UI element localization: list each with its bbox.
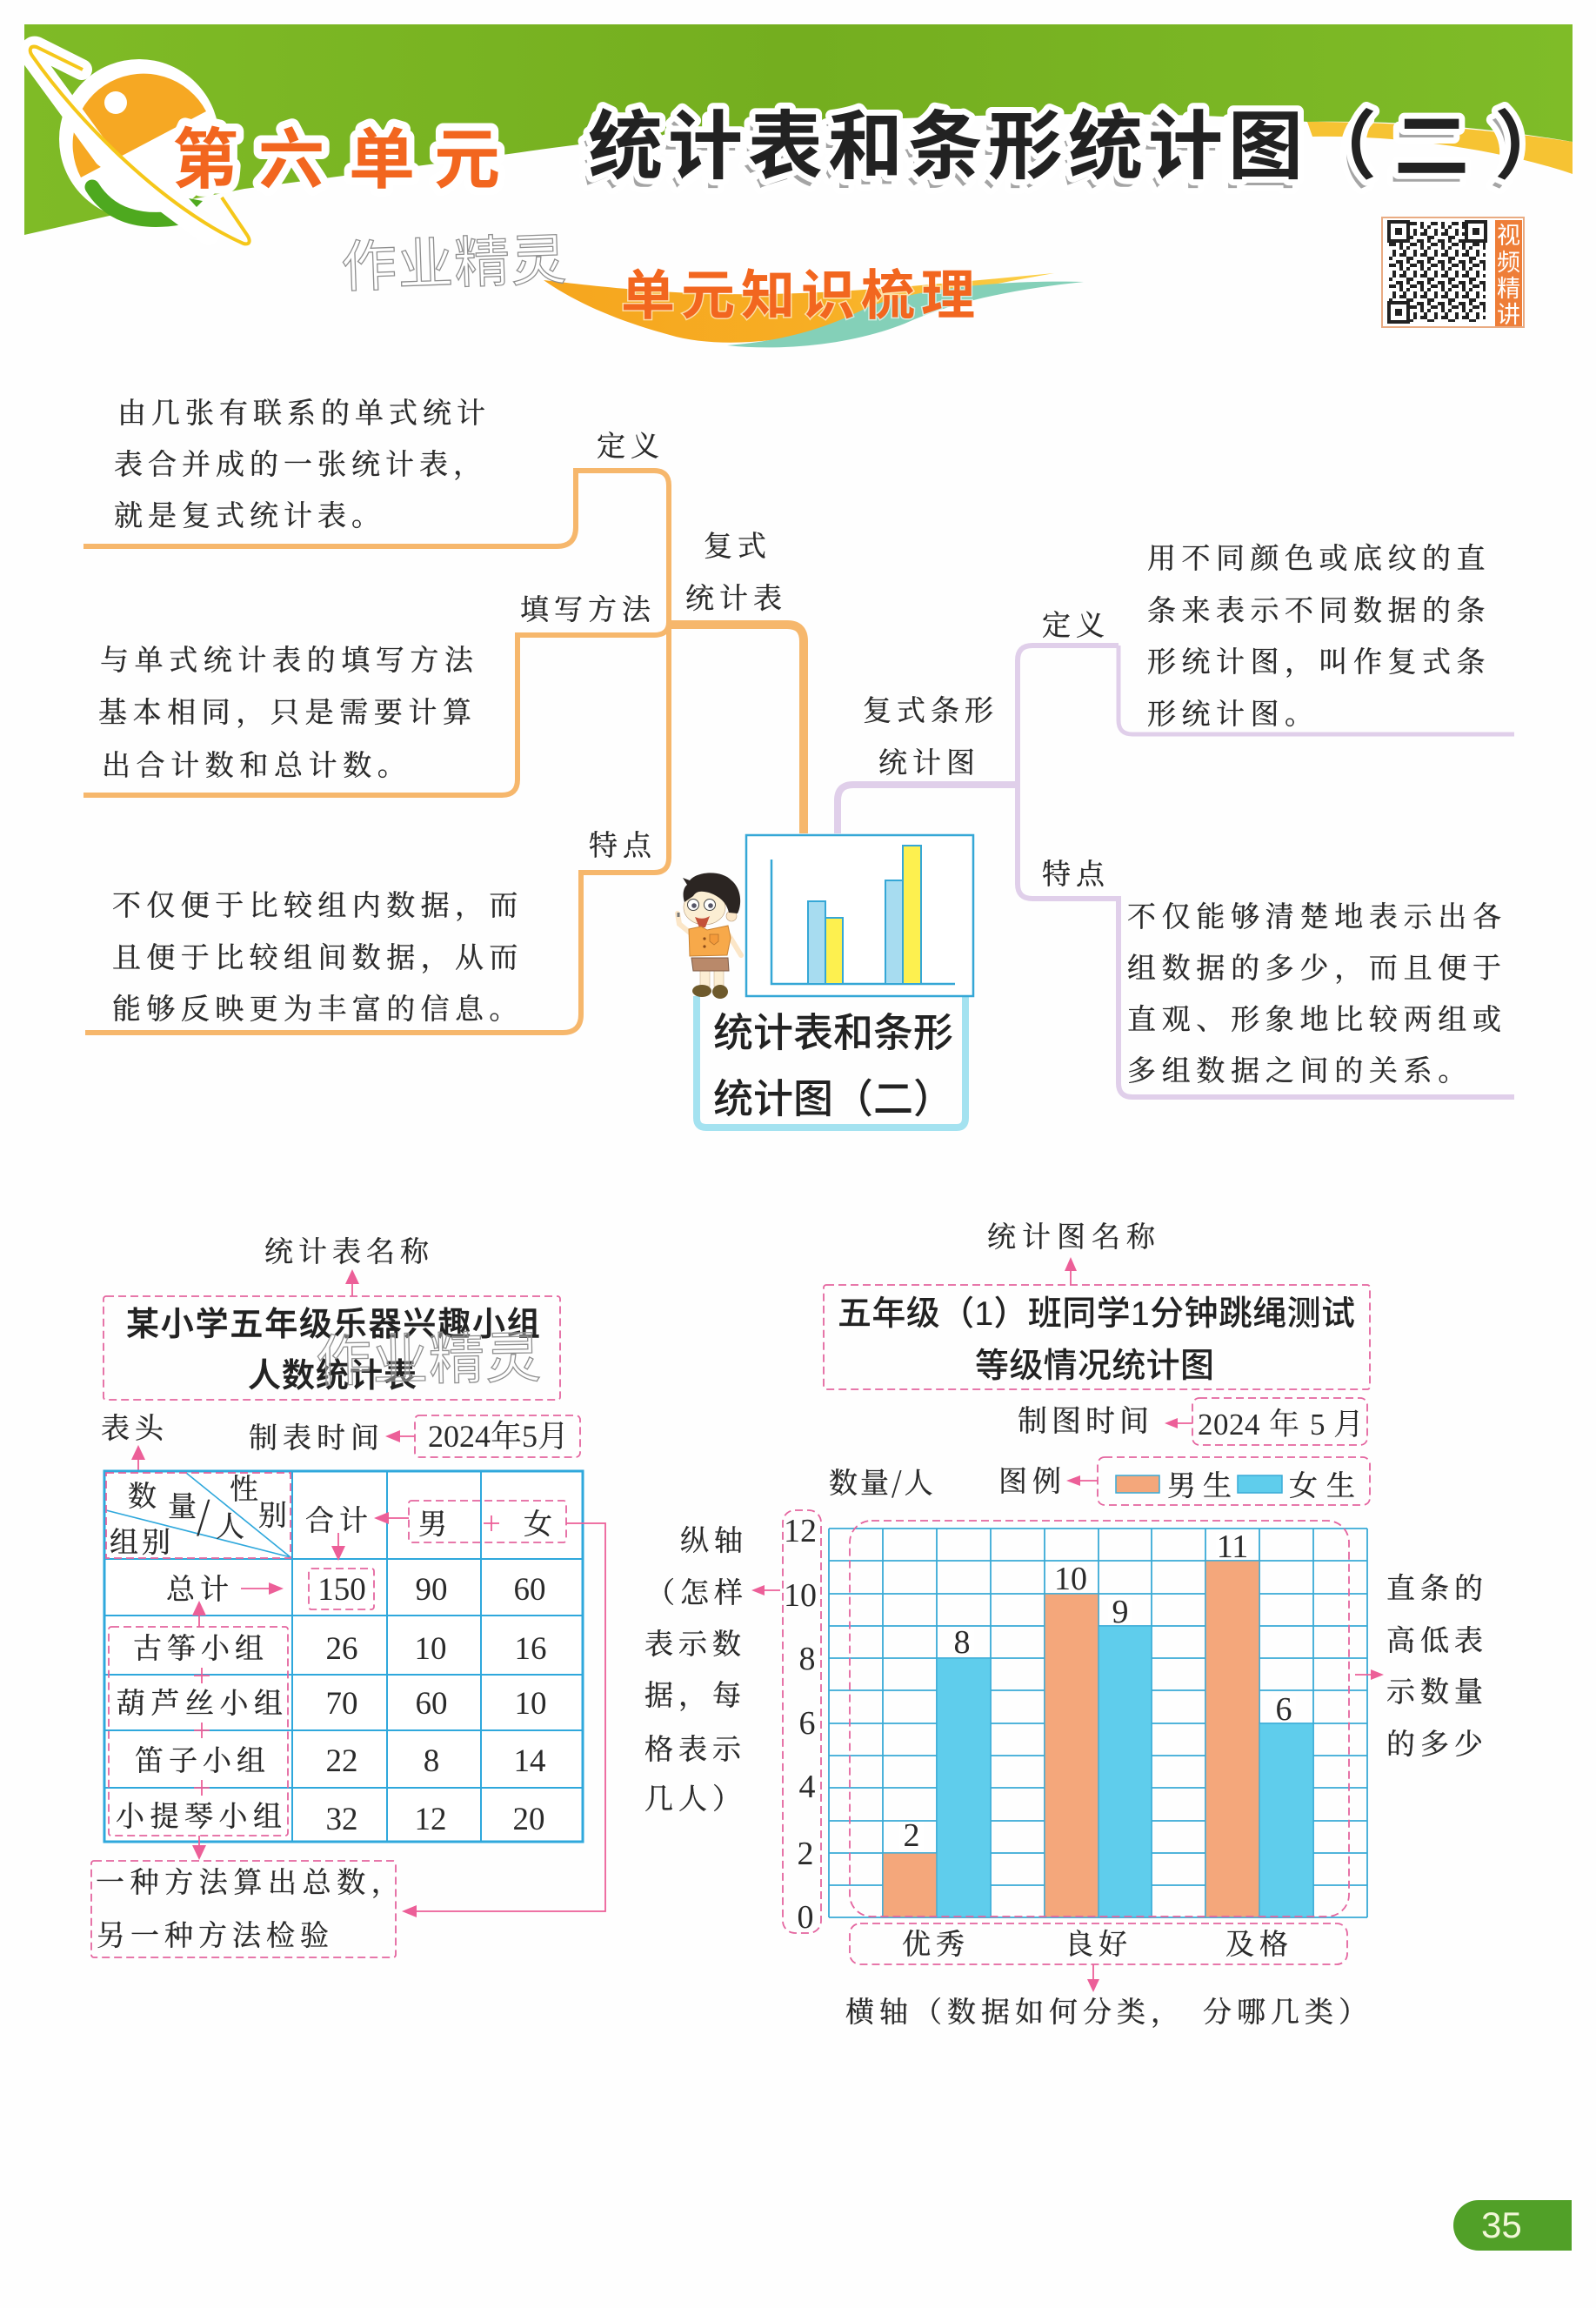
central topic box: title bracket [697, 996, 965, 1127]
arrow: right connector [402, 1523, 605, 1917]
table corner header labels: 数 [128, 1474, 157, 1515]
y axis note: 表示数 [644, 1622, 746, 1662]
row labels: 古筝小组 [133, 1626, 269, 1667]
left node: features text: 不仅便于比较组内数据，而 [112, 883, 524, 924]
left node: filling method text [98, 638, 479, 784]
branch label: compound table [685, 524, 787, 617]
branch label: compound bar chart [863, 688, 998, 781]
arrow: date [385, 1430, 415, 1442]
watermark over table title: 作业精灵 [315, 1327, 542, 1393]
table values: 20 [513, 1802, 544, 1837]
table values: 8 [424, 1743, 439, 1779]
y axis note: （怎样 [646, 1570, 748, 1611]
main title: 统计表和条形统计图（二） [583, 114, 1564, 197]
right node: features text: 直观、形象地比较两组或 [1127, 997, 1507, 1038]
table values: 60 [416, 1686, 447, 1722]
central topic: title text: 统计图（二） [713, 1076, 953, 1121]
bar height note [1386, 1566, 1488, 1763]
table values: 14 [513, 1743, 546, 1779]
right node: definition text: 形统计图。 [1147, 692, 1319, 733]
y axis labels: 12 [784, 1513, 817, 1549]
dashed box: method note: 一种方法算出总数， [96, 1860, 405, 1901]
bar value labels: 11 [1217, 1529, 1248, 1565]
table values: 10 [414, 1631, 447, 1667]
table values: 70 [325, 1686, 358, 1722]
arrow: caption up [345, 1269, 359, 1296]
chart caption label: 统计图名称 [987, 1214, 1161, 1255]
branch label: compound table: 复式 [704, 524, 771, 565]
dashed box: table date: 2024年5月 [428, 1419, 569, 1454]
bar value labels: 8 [953, 1624, 971, 1661]
table values: 150 [317, 1572, 366, 1608]
left node: definition label: 定义 [597, 424, 664, 465]
bar height note: 示数量 [1386, 1669, 1488, 1710]
watermark: 作业精灵 [340, 228, 567, 298]
right node: definition text [1147, 536, 1491, 733]
table values: 32 [325, 1802, 358, 1837]
table corner header labels: / [197, 1485, 210, 1541]
bar height note: 高低表 [1386, 1618, 1488, 1659]
dashed box: chart title: 五年级（1）班同学1分钟跳绳测试 [838, 1295, 1355, 1333]
row labels [116, 1567, 289, 1835]
swoosh decoration [544, 273, 1084, 347]
central topic: title text: 统计表和条形 [713, 1010, 953, 1055]
dashed box: male plus female [409, 1501, 566, 1542]
right node: definition text: 形统计图，叫作复式条 [1147, 639, 1491, 680]
table corner header labels: 别 [258, 1493, 287, 1534]
table corner header labels: 组别 [110, 1520, 174, 1561]
dashed box: bars area [850, 1521, 1349, 1917]
mind map: purple branches [838, 646, 1514, 1097]
left node: filling method text: 基本相同，只是需要计算 [98, 690, 477, 731]
statistics table [104, 1467, 583, 1842]
y axis note: 几人） [644, 1776, 746, 1817]
row labels: 小提琴小组 [116, 1794, 287, 1835]
right node: features text: 多组数据之间的关系。 [1127, 1048, 1472, 1089]
arrow: groups to total [192, 1601, 206, 1627]
section heading: 单元知识梳理 [621, 266, 975, 326]
right node: features text [1127, 894, 1507, 1089]
bar value labels: 9 [1112, 1594, 1129, 1630]
header banner [24, 24, 1573, 235]
right node: definition text: 条来表示不同数据的条 [1147, 588, 1491, 629]
arrow: y axis note [751, 1585, 780, 1596]
row labels: 葫芦丝小组 [117, 1681, 289, 1722]
left node: filling method label: 填写方法 [520, 587, 656, 628]
y axis labels: 10 [784, 1577, 817, 1614]
central topic: mini bar chart icon [746, 835, 973, 996]
column headers: 男 [418, 1502, 452, 1542]
table values: 26 [325, 1631, 358, 1667]
grid [829, 1529, 1367, 1917]
dashed box: 150 [309, 1569, 374, 1609]
bar height note: 的多少 [1386, 1722, 1488, 1763]
left node: features text [112, 883, 524, 1027]
y axis labels: 8 [798, 1641, 816, 1677]
central topic: title text [713, 1010, 953, 1121]
y axis labels: 0 [797, 1899, 814, 1936]
table corner header labels: 人 [216, 1504, 244, 1545]
arrow: chart caption [1065, 1257, 1077, 1285]
right node: definition label: 定义 [1042, 603, 1110, 644]
dashed box: table title: 某小学五年级乐器兴趣小组 [126, 1307, 542, 1343]
table header label: 表头 [101, 1406, 169, 1447]
mind map: orange branches [83, 471, 804, 1033]
x axis note: 分哪几类） [1203, 1990, 1372, 2030]
y axis note: 据，每 [644, 1673, 746, 1714]
dashed box: table title: 人数统计表 [248, 1358, 417, 1395]
column headers: 女 [524, 1502, 558, 1542]
dashed box: x axis: 及格 [1225, 1922, 1293, 1963]
bar value labels: 6 [1275, 1691, 1292, 1728]
branch label: compound bar chart: 统计图 [878, 740, 980, 781]
row labels: 总计 [166, 1567, 234, 1608]
arrow: x axis down [1087, 1964, 1099, 1992]
table date label: 制表时间 [249, 1415, 384, 1456]
dashed box: x axis: 优秀 [902, 1922, 970, 1963]
right node: features text: 组数据的多少，而且便于 [1127, 946, 1507, 987]
dashed box: chart title: 等级情况统计图 [975, 1348, 1214, 1385]
icon: cartoon boy [678, 873, 741, 999]
legend: 女生 [1289, 1463, 1360, 1504]
dashed box: chart date [1192, 1398, 1367, 1445]
dashed box: x axis [850, 1922, 1347, 1964]
legend [1098, 1457, 1370, 1505]
y axis labels: 4 [798, 1769, 816, 1805]
left node: features label: 特点 [589, 823, 657, 864]
table values [317, 1572, 546, 1837]
main title: 统计表和条形统计图（二） [588, 105, 1569, 189]
table corner header labels: 量 [168, 1484, 197, 1525]
arrow: table header up [131, 1445, 145, 1471]
branch label: compound bar chart: 复式条形 [863, 688, 998, 729]
unit label: 第六单元: 第六单元 [172, 124, 500, 197]
chart date label: 制图时间 [1018, 1397, 1153, 1440]
left node: filling method text: 与单式统计表的填写方法 [100, 638, 479, 679]
left node: definition text [114, 391, 491, 534]
table values: 90 [416, 1572, 447, 1608]
dashed box: method note: 另一种方法检验 [97, 1913, 334, 1954]
dashed box: y axis [783, 1510, 821, 1933]
QR code block [1382, 217, 1524, 330]
dashed box: x axis: 良好 [1065, 1922, 1132, 1963]
left node: definition text: 由几张有联系的单式统计 [117, 391, 491, 431]
dashed box: chart date: 2024年5月 [1198, 1408, 1364, 1442]
x axis note: 横轴（数据如何分类， [845, 1990, 1185, 2030]
table corner header labels: 性 [230, 1467, 258, 1508]
bar chart [784, 1513, 1367, 1936]
bar value labels [899, 1529, 1296, 1854]
left node: features text: 且便于比较组间数据，从而 [112, 935, 524, 976]
table corner header labels [110, 1467, 287, 1561]
table values: 60 [513, 1572, 546, 1608]
y axis labels: 2 [797, 1836, 814, 1872]
dashed box: group rows [109, 1627, 288, 1836]
table values: 16 [515, 1631, 546, 1667]
arrow: to total column [374, 1512, 409, 1524]
y axis title: 数量/人 [829, 1461, 936, 1502]
legend: 男生 [1167, 1463, 1237, 1504]
branch label: compound table: 统计表 [685, 576, 787, 617]
y axis note [644, 1518, 748, 1817]
y axis note: 纵轴 [680, 1518, 748, 1559]
arrow: total column down [331, 1533, 345, 1561]
table values: 12 [414, 1802, 447, 1837]
table caption label: 统计表名称 [264, 1229, 434, 1270]
arrow: legend [1066, 1475, 1098, 1486]
arrow: chart date [1165, 1418, 1192, 1428]
y axis labels: 6 [798, 1705, 816, 1742]
QR code block: 视频精讲 [1497, 217, 1520, 330]
arrow: bar height note [1355, 1669, 1384, 1680]
bars [883, 1561, 1313, 1917]
bar value labels: 10 [1054, 1561, 1087, 1597]
column headers [305, 1498, 558, 1542]
left node: definition text: 就是复式统计表。 [114, 493, 385, 534]
y axis labels [784, 1513, 817, 1936]
page number [1453, 2200, 1572, 2251]
icon: planet logo [30, 47, 250, 244]
y axis note: 格表示 [644, 1727, 746, 1768]
right node: features text: 不仅能够清楚地表示出各 [1127, 894, 1507, 935]
right node: features label: 特点 [1042, 852, 1110, 893]
column headers: 合计 [305, 1498, 373, 1539]
row labels: 笛子小组 [135, 1738, 270, 1779]
left node: features text: 能够反映更为丰富的信息。 [112, 987, 524, 1027]
bar value labels: 2 [903, 1817, 920, 1854]
legend label: 图例 [998, 1459, 1066, 1500]
left node: definition text: 表合并成的一张统计表， [114, 442, 487, 483]
arrow: groups down [192, 1836, 206, 1860]
table values: 22 [325, 1743, 358, 1779]
page number: 35 [1481, 2204, 1522, 2245]
arrow: total row [241, 1582, 284, 1595]
bar height note: 直条的 [1386, 1566, 1488, 1607]
right node: definition text: 用不同颜色或底纹的直 [1147, 536, 1491, 577]
dashed box: chart title [824, 1285, 1370, 1389]
table values: 10 [515, 1686, 546, 1722]
left node: filling method text: 出合计数和总计数。 [102, 743, 411, 784]
dashed box: method note [91, 1860, 405, 1957]
dashed box: table title [104, 1296, 560, 1400]
